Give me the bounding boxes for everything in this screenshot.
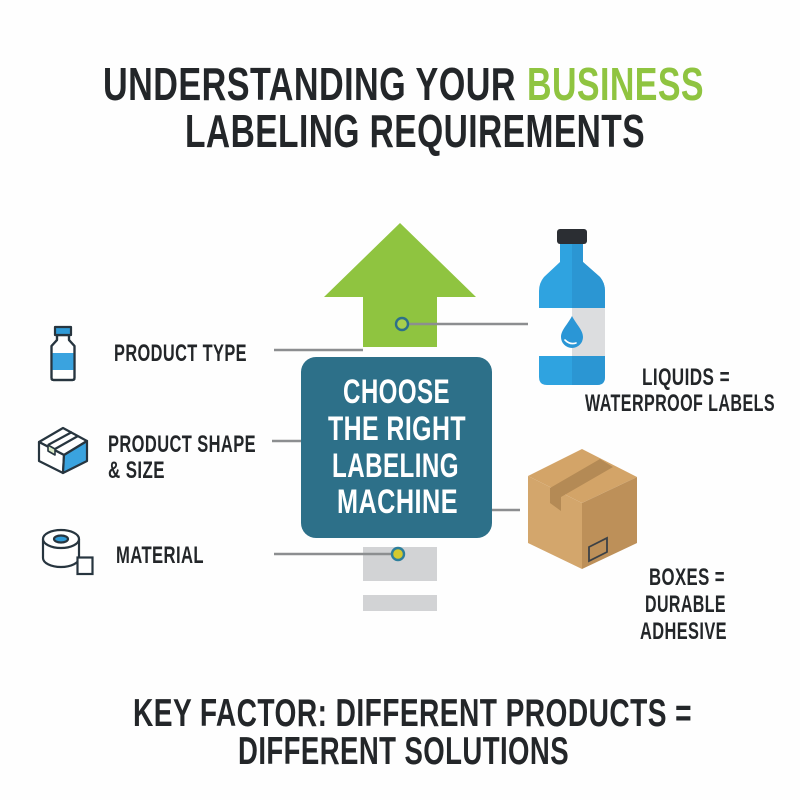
- label: boxes = durable adhesive: DURABLE: [645, 591, 726, 618]
- label: product shape and size: [108, 431, 256, 484]
- central panel: choose the right labeling machine: MACHINE: [337, 483, 458, 521]
- central panel: choose the right labeling machine: THE RIGHT: [328, 410, 466, 448]
- label: product type: PRODUCT TYPE: [114, 340, 247, 367]
- central panel: choose the right labeling machine: CHOOSE: [343, 373, 450, 411]
- title: LABELING REQUIREMENTS: [185, 105, 645, 157]
- icon: large cardboard box: [528, 449, 637, 569]
- central panel: choose the right labeling machine: [301, 357, 492, 538]
- grey base block with node: [363, 547, 437, 581]
- title: BUSINESS: [527, 58, 704, 110]
- arrow connector with node: [396, 318, 528, 330]
- title: [103, 58, 704, 157]
- label: material: MATERIAL: [116, 542, 204, 569]
- label: product shape and size: & SIZE: [108, 457, 165, 484]
- icon: small bottle: [52, 327, 74, 380]
- icon: large blue bottle: [539, 229, 605, 385]
- label: boxes = durable adhesive: ADHESIVE: [640, 618, 727, 645]
- green up arrow: [324, 223, 476, 347]
- title: UNDERSTANDING YOUR: [103, 58, 516, 110]
- footer: key factor: DIFFERENT SOLUTIONS: [238, 730, 569, 773]
- icon: tape roll: [43, 530, 92, 574]
- label: liquids = waterproof labels: LIQUIDS =: [642, 364, 730, 391]
- icon: small box: [39, 428, 87, 473]
- label: product shape and size: PRODUCT SHAPE: [108, 431, 256, 458]
- label: boxes = durable adhesive: BOXES =: [649, 564, 725, 591]
- label: boxes = durable adhesive: [640, 564, 727, 645]
- grey base bar: [363, 595, 437, 611]
- connector lines: [272, 350, 520, 554]
- footer: key factor: [133, 692, 692, 773]
- central panel: choose the right labeling machine: LABELING: [332, 447, 459, 485]
- label: liquids = waterproof labels: [585, 364, 775, 417]
